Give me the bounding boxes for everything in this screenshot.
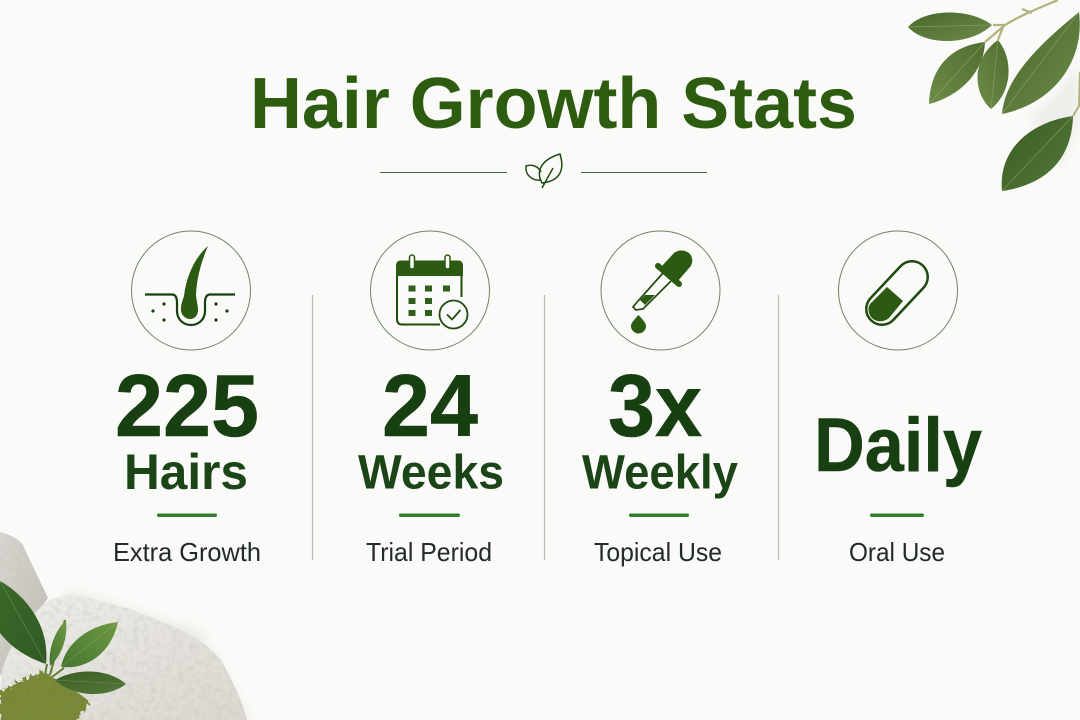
value: 3x bbox=[608, 356, 702, 455]
stat: Daily bbox=[814, 231, 982, 567]
icon: dropper bbox=[601, 231, 720, 350]
caption: Trial Period bbox=[366, 537, 492, 567]
stat: 3x Weekly bbox=[582, 231, 738, 567]
caption: Oral Use bbox=[849, 537, 945, 567]
stat: 24 Weeks bbox=[358, 231, 504, 567]
unit: Hairs bbox=[124, 444, 248, 500]
stat: 225 Hairs bbox=[113, 231, 261, 567]
value: 225 bbox=[115, 356, 259, 455]
title divider with leaf icon bbox=[380, 154, 707, 188]
value: Daily bbox=[814, 403, 982, 488]
column dividers bbox=[312, 295, 778, 560]
accent bar bbox=[629, 514, 689, 517]
icon: capsule bbox=[838, 231, 958, 350]
unit: Weeks bbox=[358, 446, 504, 500]
accent bar bbox=[870, 514, 924, 517]
accent bar bbox=[157, 514, 217, 517]
icon: hair follicle bbox=[132, 231, 250, 350]
title: Hair Growth Stats bbox=[250, 64, 857, 144]
caption: Topical Use bbox=[594, 537, 722, 567]
value: 24 bbox=[382, 356, 478, 455]
decoration: bottom-left rocks, leaves and moss bbox=[0, 532, 250, 720]
icon: calendar with check bbox=[370, 231, 490, 350]
caption: Extra Growth bbox=[113, 537, 261, 567]
unit: Weekly bbox=[582, 446, 738, 500]
decoration: top-right leaf branch bbox=[908, 0, 1080, 191]
accent bar bbox=[399, 514, 460, 517]
